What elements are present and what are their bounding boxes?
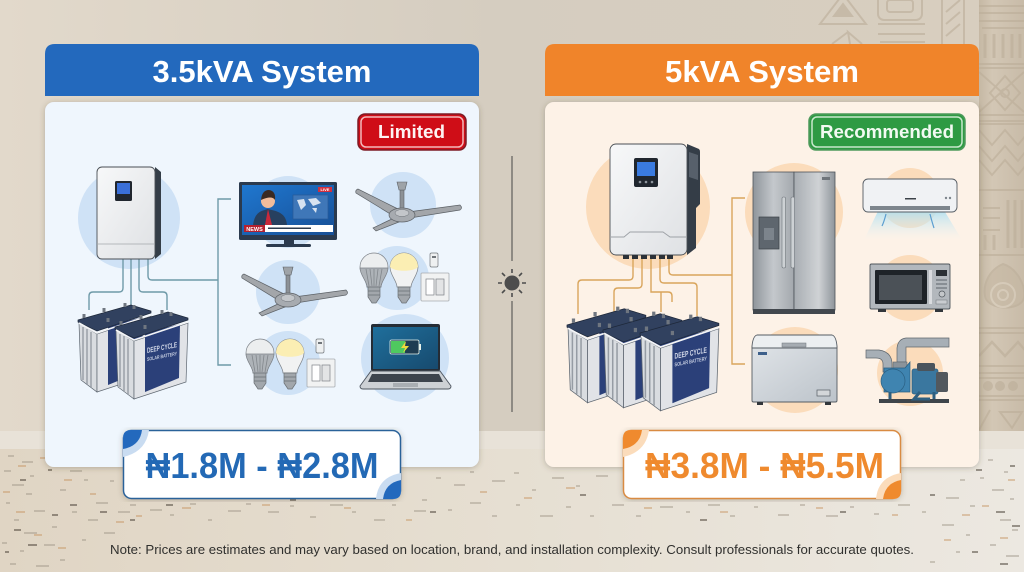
wiring: [578, 198, 745, 364]
price text: ₦3.8M - ₦5.5M: [645, 445, 884, 486]
battery front: SOLAR BATTERY: [147, 351, 177, 363]
icon: television news: [239, 182, 337, 247]
icon: bulbs and switch bottom left: [246, 339, 335, 389]
icon: television news: NEWS: [246, 227, 263, 233]
panel: 5kVA system: [545, 44, 979, 467]
battery front: SOLAR BATTERY: [675, 356, 707, 368]
badge: Recommended: Recommended: [820, 122, 954, 142]
wiring: [89, 199, 231, 365]
background wall: [0, 0, 1024, 432]
wall tribal pattern: [820, 0, 1024, 430]
corner accent top left: [623, 430, 649, 457]
panel body: [45, 102, 479, 467]
icon: three deep cycle batteries: [567, 307, 719, 411]
corner accent bottom right: [876, 473, 901, 499]
corner accent bottom right: [376, 473, 401, 499]
icon backdrop circles: [586, 145, 943, 413]
battery front: [115, 310, 188, 399]
icon: ceiling fan left: [242, 267, 348, 316]
price box: 5kVA: [623, 430, 901, 499]
icon: chest freezer: [752, 335, 837, 405]
baseboard: [0, 431, 1024, 449]
battery middle: [603, 312, 682, 408]
icon: air conditioner: [863, 179, 962, 240]
icon: laptop with battery: [360, 324, 451, 389]
icon: water pump: [866, 338, 949, 403]
battery front: [640, 315, 719, 411]
panel body: [545, 102, 979, 467]
icon: refrigerator: [753, 172, 835, 314]
price text: ₦1.8M - ₦2.8M: [146, 445, 378, 486]
badge: Limited: Limited: [378, 122, 445, 142]
panel: 3.5kVA system: [45, 44, 479, 467]
icon: inverter: [610, 144, 700, 259]
icon backdrop circles: [78, 167, 449, 402]
icon: bulbs and switch top right: [360, 253, 449, 303]
badge: Limited: [358, 114, 466, 150]
icon: television news: LIVE: [321, 187, 330, 192]
header: 3.5kVA System: 3.5kVA System: [152, 54, 372, 89]
icon: two deep cycle batteries: [78, 303, 188, 399]
battery back: [78, 303, 151, 392]
corner accent top left: [123, 430, 149, 457]
header: 3.5kVA System: [45, 44, 479, 96]
header: 5kVA System: [545, 44, 979, 96]
footnote: Note: Prices are estimates and may vary based on location, brand, and installation complexity. Consult professionals for accurate quotes.: [110, 542, 914, 557]
icon: inverter: [97, 167, 161, 259]
battery front: DEEP CYCLE: [675, 346, 707, 361]
badge: Recommended: [809, 114, 965, 150]
center divider with sun icon: [498, 156, 526, 412]
battery front: DEEP CYCLE: [147, 340, 177, 355]
battery back: [567, 307, 646, 403]
header: 5kVA System: 5kVA System: [665, 54, 859, 89]
icon: ceiling fan top right: [356, 182, 462, 231]
terrazzo floor: [0, 449, 1024, 572]
icon: microwave: [870, 264, 950, 312]
price box: 3.5kVA: [123, 430, 401, 499]
